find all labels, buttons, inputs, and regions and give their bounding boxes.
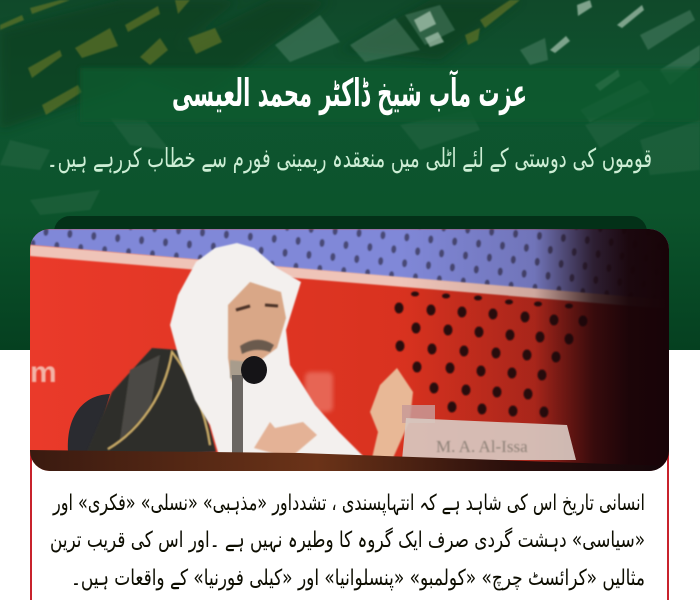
panel shadow behind photo xyxy=(54,216,647,256)
name plate xyxy=(402,418,576,460)
white lower section xyxy=(0,350,700,600)
panel: red text frame xyxy=(31,350,668,600)
microphone xyxy=(232,356,267,455)
title band xyxy=(80,68,700,122)
white stripe xyxy=(30,244,624,304)
photo: speaker at the forum xyxy=(30,229,669,471)
eyes and beard xyxy=(230,305,278,382)
body text xyxy=(50,491,645,591)
white headscarf xyxy=(170,243,366,459)
name plate: M. A. Al-Issa xyxy=(436,437,528,456)
background: aerial city photo xyxy=(0,0,700,215)
left hand xyxy=(254,422,318,453)
backdrop logo fragment: m xyxy=(30,356,57,389)
perforated red dots xyxy=(394,292,588,418)
chair xyxy=(68,394,110,452)
right hand xyxy=(370,368,413,458)
robe xyxy=(85,348,216,456)
blue perforated band xyxy=(30,229,669,302)
right dark fade xyxy=(434,229,669,471)
stage red backdrop xyxy=(30,229,669,471)
face xyxy=(228,282,286,382)
backdrop logo right xyxy=(305,372,333,412)
water glass xyxy=(402,405,435,423)
background: green header band xyxy=(0,0,700,350)
desk xyxy=(30,450,669,471)
